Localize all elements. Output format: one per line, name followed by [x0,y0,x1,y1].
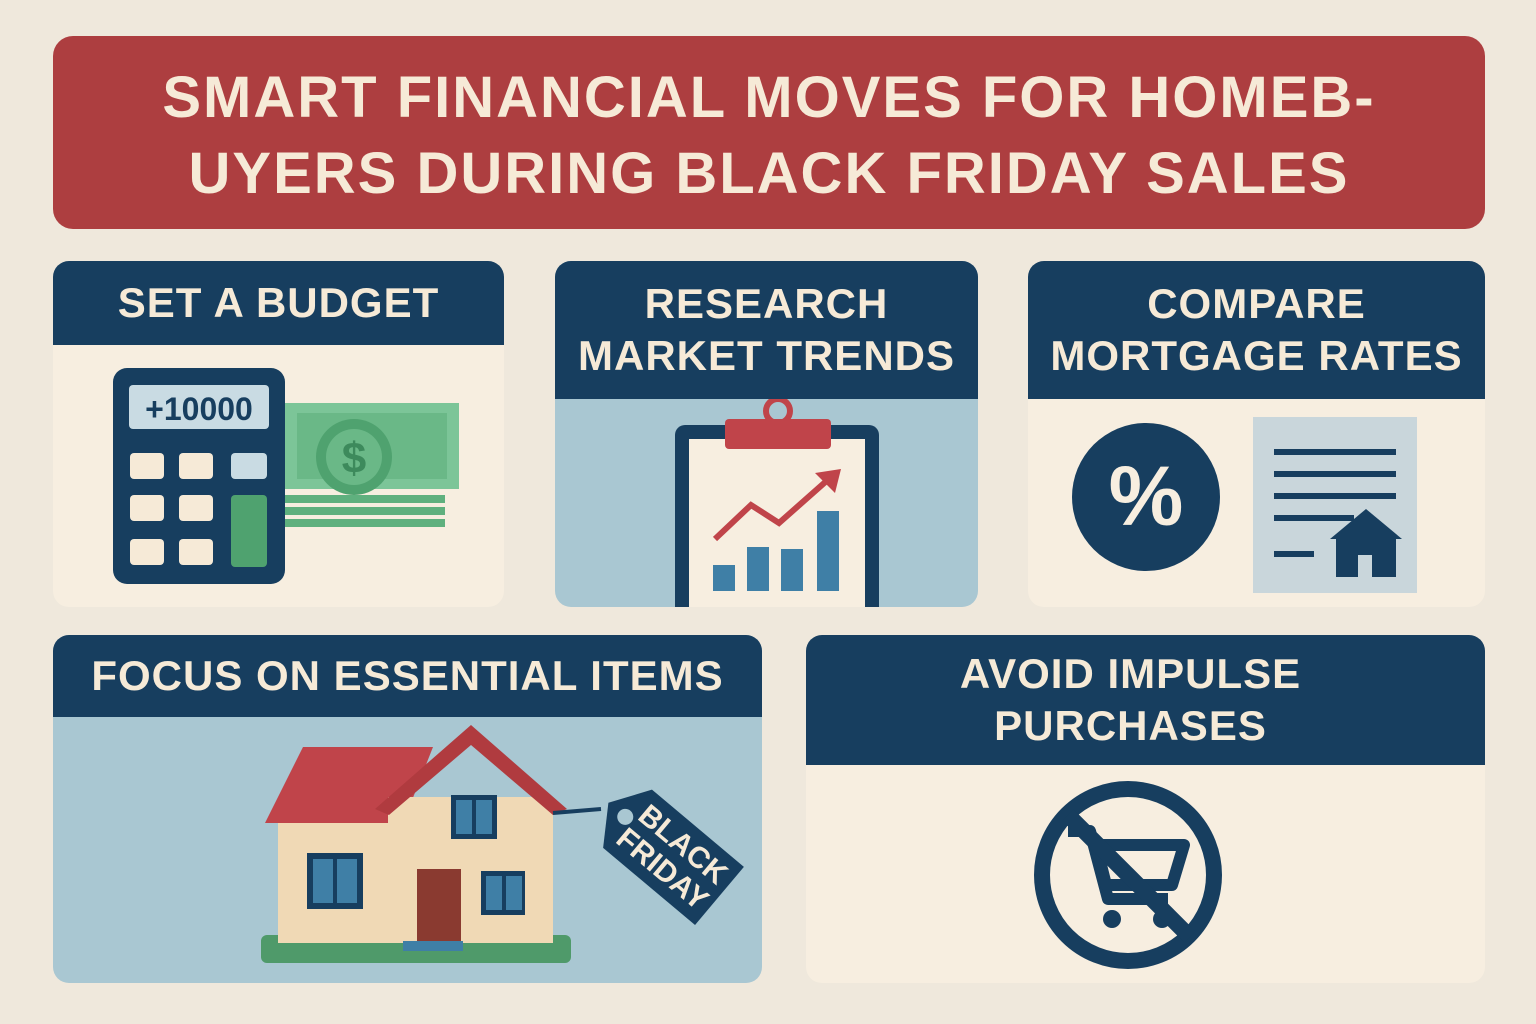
heading: set a budget: SET A BUDGET [118,279,439,326]
heading: compare mortgage rates [1028,261,1485,399]
panel: avoid impulse purchases [806,635,1485,983]
title: UYERS DURING BLACK FRIDAY SALES [189,141,1349,206]
icon: calculator and cash: +10000 [145,391,253,427]
heading: research market trends [555,261,978,399]
heading: focus on essential items: FOCUS ON ESSENTIAL ITEMS [91,652,724,699]
heading: research market trends: MARKET TRENDS [578,332,955,379]
heading: research market trends: RESEARCH [645,280,888,327]
heading: compare mortgage rates: COMPARE [1147,280,1366,327]
icon: clipboard chart [675,399,879,607]
heading: compare mortgage rates: MORTGAGE RATES [1050,332,1463,379]
heading: avoid impulse purchases: PURCHASES [994,702,1267,749]
icon: calculator and cash [113,368,459,584]
icon: percent and document [1072,417,1417,593]
title: SMART FINANCIAL MOVES FOR HOMEB- [162,65,1376,130]
heading: focus on essential items [53,635,762,717]
panel: focus on essential items [53,635,762,983]
icon: percent and document: % [1109,449,1183,543]
heading: set a budget [53,261,504,345]
title [53,36,1485,229]
icon: house with black friday tag: BLACK [632,798,734,891]
icon: no shopping cart [1034,781,1222,969]
panel: compare mortgage rates [1028,261,1485,607]
panel: research market trends [555,261,978,607]
icon: house with black friday tag [261,725,744,963]
icon: house with black friday tag: FRIDAY [610,822,714,917]
heading: avoid impulse purchases [806,635,1485,765]
panel: set a budget [53,261,504,607]
icon: calculator and cash: $ [342,434,366,483]
heading: avoid impulse purchases: AVOID IMPULSE [960,650,1301,697]
